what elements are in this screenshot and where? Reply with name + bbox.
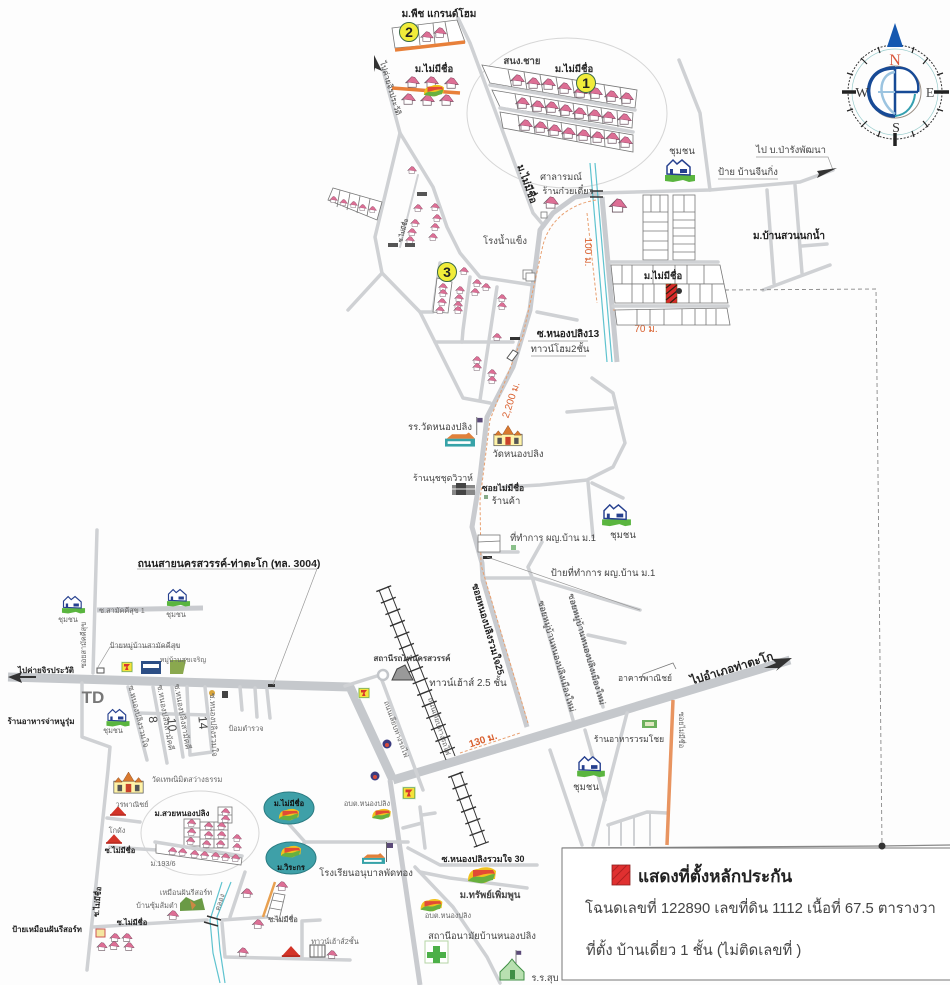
stores on highway: TD	[82, 688, 104, 707]
labels south west: ชุมชน	[58, 615, 78, 624]
place labels north: ม.ไม่มีชื่อ	[644, 268, 682, 282]
unnamed village oval	[264, 792, 314, 824]
labels south west: ซ.หนองปลิงรวมใจ	[126, 684, 151, 749]
labels south west: คลอง	[213, 892, 227, 912]
station and roundabout	[378, 665, 413, 680]
labels south west: ร้านอาหารจ่าหนูรุ่ม	[7, 716, 75, 727]
labels south west: ชุมชน	[103, 726, 123, 735]
place labels north: ม.ไม่มีชื่อ	[415, 61, 453, 75]
place labels north: โรงน้ำแข็ง	[483, 234, 527, 247]
highway labels: ซอยหนองปลิงรวมใจ25	[469, 582, 507, 677]
place labels north: ม.บ้านสวนนกน้ำ	[753, 228, 825, 242]
south scattered houses	[97, 882, 337, 958]
south village plots and houses	[155, 807, 242, 865]
labels south west: ซ.หนองปลิงรวมใจ	[208, 693, 219, 757]
place labels north: ที่ทำการ ผญ.บ้าน ม.1	[510, 531, 596, 543]
compass rose: S	[892, 121, 900, 136]
labels south west: สถานีอนามัยบ้านหนองปลิง	[428, 930, 536, 941]
labels south west: ซ.สามัคคีสุข 1	[99, 606, 145, 615]
arrow: to Tha Tako	[764, 658, 792, 671]
temples schools and shops	[96, 417, 524, 980]
highway labels: ถนนเลียบทางรถไฟ	[426, 696, 453, 756]
labels south west: ป้ายหมู่บ้านสามัคคีสุข	[110, 641, 180, 650]
labels south west: ซ.หนองปลิงสามัคคี	[155, 684, 176, 751]
village 2 lots	[392, 20, 465, 50]
wirakorn village oval: ม.วิระกร	[277, 863, 306, 872]
distance labels	[468, 238, 658, 750]
distance labels: 100 ม.	[582, 238, 593, 266]
canal south	[204, 882, 231, 983]
highway labels: ทาวน์เฮ้าส์ 2.5 ชั้น	[429, 675, 507, 689]
labels south west: ป้ายเหมือนฝันรีสอร์ท	[12, 924, 82, 934]
labels south west: ซ.ไม่มีชื่อ	[117, 916, 147, 927]
highway labels: ไปค่ายจิรประวัติ	[17, 665, 74, 675]
labels south west: อบต.หนองปลิง	[425, 911, 472, 920]
label underlines and leaders	[98, 157, 833, 685]
labels south west: ม.ทรัพย์เพิ่มพูน	[460, 887, 521, 902]
wirakorn village oval	[266, 842, 316, 874]
compass rose: N	[889, 52, 901, 69]
labels south west: ซ.ไม่มีชื่อ	[90, 886, 103, 917]
badge 3	[438, 262, 456, 282]
badge 3: 3	[443, 264, 451, 280]
dashed connector to legend	[725, 289, 882, 845]
place labels north: สนง.ชาย	[504, 56, 540, 67]
compass rose: E	[926, 86, 934, 101]
village 3 lots and houses	[433, 268, 506, 384]
village ellipses	[141, 38, 667, 875]
village 1 houses	[511, 75, 633, 147]
place labels north: ซ.ไม่มีชื่อ	[395, 217, 410, 243]
route distance markers	[460, 200, 670, 753]
legend panel	[562, 842, 950, 980]
arrow: to Chiraprawat camp	[8, 672, 36, 683]
badge 2	[400, 22, 418, 42]
badge 1: 1	[582, 75, 590, 91]
place labels north: รร.วัดหนองปลิง	[408, 422, 472, 433]
highway labels: ร้านอาหารวรมโชย	[594, 734, 664, 744]
place labels north: ทาวน์โฮม2ชั้น	[531, 342, 590, 355]
labels south west: ซ.หนองปลิงรวมใจ 30	[442, 853, 525, 864]
labels south west: ซ.ไม่มีชื่อ	[105, 844, 135, 855]
labels south west: ซ.หนองปลิงสามัคคี	[172, 683, 193, 750]
highway labels: ชุมชน	[573, 782, 599, 793]
place labels north: ซ.หนองปลิง13	[537, 328, 600, 340]
labels south west: ซอยสามัคคีสุข	[79, 622, 88, 668]
left lots and scattered houses	[328, 166, 442, 247]
place labels north: ซอยไม่มีชื่อ	[482, 481, 524, 493]
place labels north: ร้านนุชชุดวิวาห์	[413, 473, 473, 484]
labels south west: ป้อมตำรวจ	[229, 724, 263, 733]
labels south west: ร.ร.สุบ	[531, 973, 559, 984]
legend detail lines: ที่ตั้ง บ้านเดี่ยว 1 ชั้น (ไม่ติดเลขที่ )	[586, 939, 801, 959]
labels south west: โรงเรียนอนุบาลพัดทอง	[319, 867, 413, 879]
labels south west: ชุมชน	[166, 610, 186, 619]
place labels north: ป้าย บ้านจีนกิ่ง	[718, 165, 778, 178]
highway labels: ซอยหมู่บ้านหนองปลิงเมืองใหม่	[565, 592, 608, 706]
legend detail lines	[585, 897, 936, 959]
canal north	[590, 163, 612, 362]
distance labels: 130 ม.	[468, 731, 499, 750]
labels south west: ทาวน์เฮ้าส์2ชั้น	[311, 936, 359, 946]
place labels north: ม.ไม่มีชื่อ	[555, 61, 593, 75]
railway	[379, 586, 486, 847]
compass rose: W	[855, 86, 869, 101]
labels south west: ซ.ไม่มีชื่อ	[268, 913, 298, 924]
place labels north: ชุมชน	[669, 146, 695, 157]
labels south west: วรพาณิชย์	[116, 800, 148, 809]
highway labels: ซอยไม่มีชื่อ	[677, 712, 687, 748]
place labels north	[378, 7, 826, 579]
place labels north: ป้ายที่ทำการ ผญ.บ้าน ม.1	[551, 566, 655, 579]
place labels north: ศาลารมณ์	[540, 171, 582, 182]
legend swatch	[612, 865, 630, 885]
highway labels: ถนนเลียบทางรถไฟ	[382, 699, 411, 759]
small buildings north	[507, 197, 626, 361]
labels south west: 10	[164, 717, 180, 732]
village 1 lots	[482, 65, 637, 152]
place labels north: ชุมชน	[610, 530, 636, 541]
highway labels: ไปอำเภอท่าตะโก	[687, 648, 775, 688]
labels south west: วัดเทพนิมิตสว่างธรรม	[152, 775, 222, 784]
labels south west: อบต.หนองปลิง	[344, 799, 391, 808]
highway labels: ซอยหมู่บ้านหนองปลิงเมืองใหม่	[535, 599, 578, 713]
collateral plot marker	[666, 284, 682, 303]
labels south west: เหมือนฝันรีสอร์ท	[160, 888, 212, 897]
legend heading: แสดงที่ตั้งหลักประกัน	[638, 863, 792, 886]
distance labels: 70 ม.	[634, 324, 658, 335]
labels south west: ม.สวยหนองปลิง	[155, 809, 210, 818]
highway labels	[17, 557, 775, 793]
community icons	[62, 160, 695, 777]
distance labels: 2,200 ม.	[501, 381, 523, 420]
place labels north: วัดหนองปลิง	[492, 449, 544, 460]
place labels north: ร้านก๋วยเตี๋ยว	[542, 184, 594, 196]
badge 1	[576, 74, 596, 92]
arrow: to Ban Pa Rang	[817, 168, 837, 178]
labels south west: บ้านซุ้มส้มตำ	[136, 901, 178, 910]
badge 2: 2	[405, 24, 413, 40]
place labels north: ร้านค้า	[492, 496, 520, 507]
north-east subdivisions	[610, 195, 730, 325]
unnamed village with orange road	[392, 77, 460, 105]
place labels north: ม.พืช แกรนด์โฮม	[402, 7, 476, 20]
labels south west: 14	[195, 715, 211, 730]
highway labels: อาคารพาณิชย์	[618, 673, 672, 683]
labels south west: โกดัง	[109, 826, 126, 835]
highway labels: สถานีรถไฟนครสวรรค์	[374, 653, 450, 663]
stores on highway	[82, 660, 676, 799]
labels south west	[7, 606, 559, 984]
labels south west: หมู่บ้านสุขเจริญ	[160, 656, 206, 664]
labels south west: 8	[146, 716, 160, 724]
place labels north: ไปค่ายจิรประวัติ	[378, 59, 403, 116]
arrow: to camp north	[374, 55, 382, 72]
place labels north: ไป บ.ป่ารังพัฒนา	[755, 144, 826, 156]
legend detail lines: โฉนดเลขที่ 122890 เลขที่ดิน 1112 เนื้อที่ 67.5 ตารางวา	[585, 897, 936, 917]
place labels north: ม.ไม่มีชื่อ	[514, 162, 541, 205]
labels south west: ม.193/6	[150, 859, 176, 868]
compass rose	[842, 23, 949, 146]
highway labels: ถนนสายนครสวรรค์-ท่าตะโก (ทล. 3004)	[138, 557, 320, 570]
unnamed village oval: ม.ไม่มีชื่อ	[274, 797, 304, 808]
